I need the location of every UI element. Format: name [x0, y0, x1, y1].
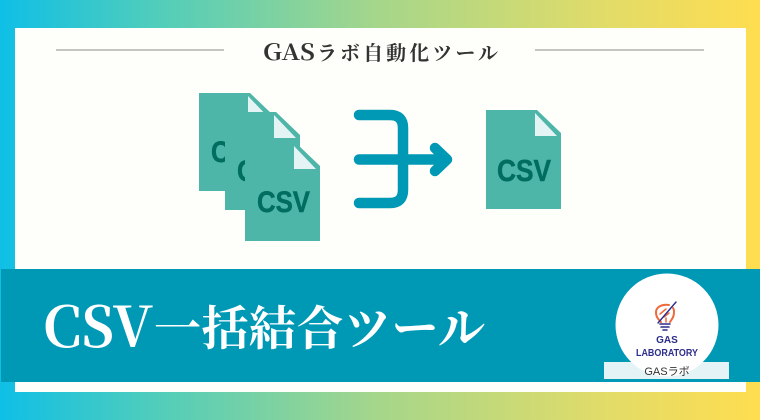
title: 一括結合ツール [154, 292, 485, 359]
badge label: GASラボ [644, 365, 690, 378]
title: CSV [43, 284, 153, 364]
logo wordmark [636, 335, 698, 359]
icon: light bulb [656, 302, 676, 330]
title [43, 284, 485, 364]
logo wordmark: LABORATORY [636, 348, 698, 359]
icon: merged CSV file: CSV [497, 153, 551, 188]
file two: CSV [237, 155, 290, 188]
heading: GAS lab automation tools: GAS [263, 36, 315, 67]
heading: GAS lab automation tools: ラボ自動化ツール [317, 37, 498, 66]
file two [225, 112, 300, 210]
file three: CSV [257, 186, 310, 219]
arrow: merge [359, 115, 447, 203]
icon: stack of three CSV files [199, 93, 320, 241]
badge circle [616, 274, 718, 376]
logo wordmark: GAS [656, 335, 678, 346]
icon: merged CSV file [486, 110, 561, 209]
logo: GAS Laboratory badge [604, 274, 729, 379]
file one [199, 93, 274, 191]
heading: GAS lab automation tools [56, 36, 704, 67]
file three [245, 143, 320, 241]
title band [1, 269, 760, 382]
file one: CSV [211, 136, 264, 169]
badge label background [604, 362, 729, 379]
